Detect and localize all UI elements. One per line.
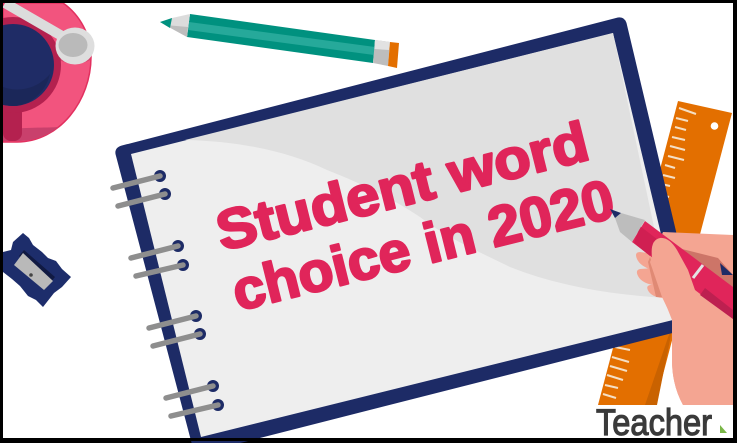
icon: coffee mug with spoon <box>0 3 94 142</box>
page shadow swoosh <box>185 33 669 298</box>
title: choice in 2020 <box>226 167 620 323</box>
icon: teal pencil <box>160 14 399 68</box>
icon: orange ruler <box>598 101 732 405</box>
icon: blue pencil sharpener <box>3 233 71 307</box>
panel: spiral notebook <box>113 18 698 443</box>
title: Student word <box>210 109 595 263</box>
notebook page <box>131 33 681 437</box>
pen <box>610 209 733 319</box>
title <box>210 109 620 323</box>
logo: Teacher: Teacher <box>596 402 712 443</box>
spiral binding rings <box>113 170 224 416</box>
fingers <box>636 252 664 298</box>
thumb <box>652 238 733 405</box>
illustration: hand holding pen <box>610 209 733 405</box>
